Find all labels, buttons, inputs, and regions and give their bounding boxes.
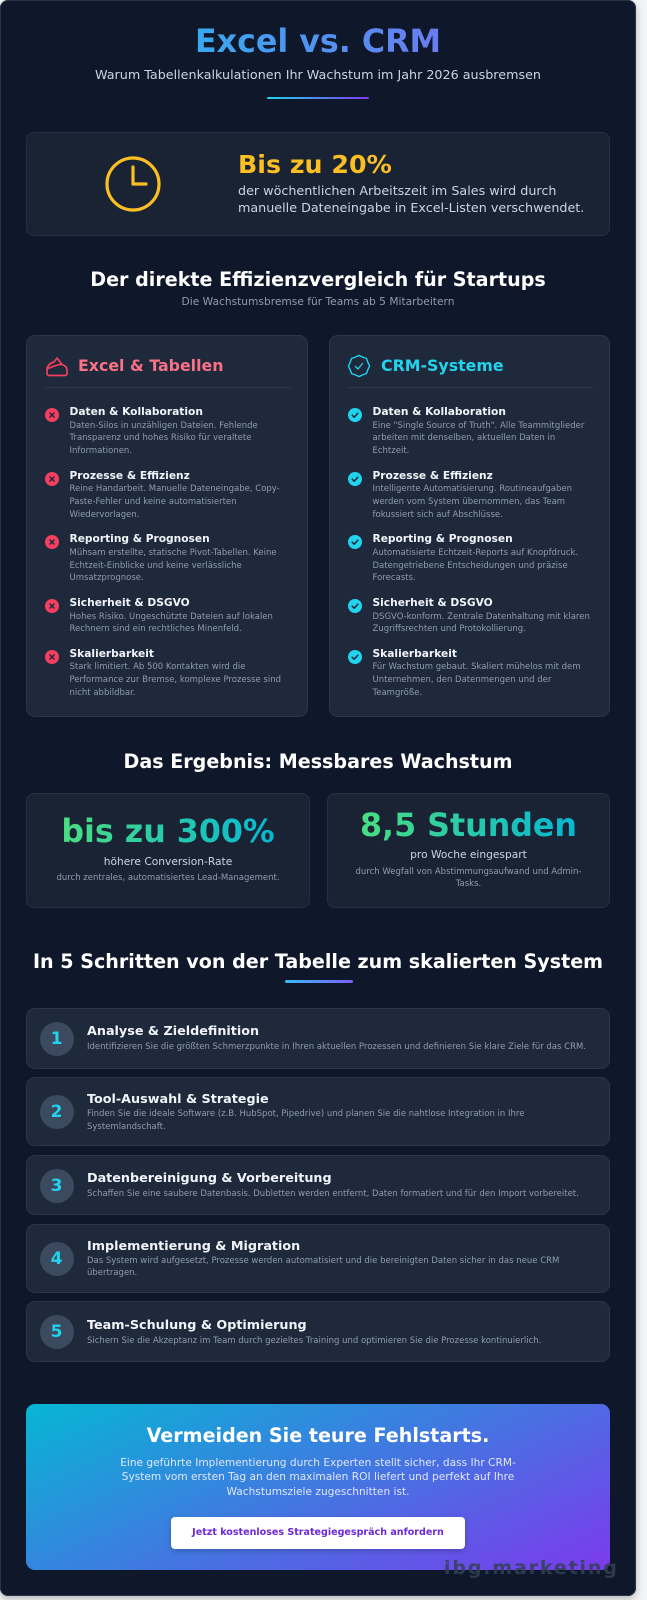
text: Für Wachstum gebaut. Skaliert mühelos mit dem	[372, 662, 581, 672]
step 3	[26, 1155, 610, 1215]
text	[87, 1256, 559, 1278]
title: Sicherheit & DSGVO	[372, 596, 493, 609]
title: Prozesse & Effizienz	[70, 469, 190, 482]
text: Automatisierte Echtzeit-Reports auf Knopfdruck.	[372, 548, 578, 558]
icon: check	[348, 535, 362, 549]
number	[40, 1315, 74, 1349]
icon: check	[348, 599, 362, 613]
title: Skalierbarkeit	[372, 647, 457, 660]
text: Sichern Sie die Akzeptanz im Team durch gezieltes Training und optimieren Sie die Prozesse kontinuierlich.	[87, 1336, 541, 1346]
text	[70, 420, 258, 456]
title: Sicherheit & DSGVO	[70, 596, 190, 609]
excel heading: Excel & Tabellen	[78, 356, 223, 375]
step 2	[26, 1077, 610, 1146]
text: Hohes Risiko. Ungeschützte Dateien auf lokalen	[70, 612, 273, 622]
icon: cross	[45, 650, 59, 664]
text	[372, 420, 584, 456]
stat value: bis zu 300%	[61, 814, 275, 850]
text: Systemlandschaft.	[87, 1122, 166, 1132]
step 1	[26, 1008, 610, 1069]
excel item 4	[45, 596, 273, 634]
number: 5	[51, 1322, 62, 1342]
title: Datenbereinigung & Vorbereitung	[87, 1171, 332, 1186]
heading: results: Das Ergebnis: Messbares Wachstum	[123, 750, 513, 773]
stat value: 8,5 Stunden	[360, 808, 577, 844]
text	[70, 662, 281, 698]
text: Finden Sie die ideale Software (z.B. HubSpot, Pipedrive) und planen Sie die nahtlose Integration in Ihre	[87, 1109, 524, 1119]
stat label: pro Woche eingespart	[410, 848, 527, 861]
excel item 3	[45, 532, 277, 583]
title: Daten & Kollaboration	[70, 405, 203, 418]
text: fokussiert sich auf Abschlüsse.	[372, 510, 503, 520]
steps divider	[284, 980, 352, 982]
number	[40, 1022, 74, 1056]
icon: clock	[105, 156, 161, 212]
watermark: ibg.marketing	[444, 1556, 619, 1578]
number: 2	[51, 1102, 62, 1122]
cta heading: Vermeiden Sie teure Fehlstarts.	[147, 1424, 489, 1447]
text	[372, 662, 581, 698]
step 4	[26, 1224, 610, 1293]
hero text: der wöchentlichen Arbeitszeit im Sales wird durch	[238, 183, 556, 198]
text: Schaffen Sie eine saubere Datenbasis. Dubletten werden entfernt, Daten formatiert und für den Import vorbereitet.	[87, 1188, 579, 1198]
crm item 2	[348, 469, 572, 520]
title: Skalierbarkeit	[70, 647, 154, 660]
excel item 1	[45, 405, 258, 456]
icon: excel cloud	[46, 357, 68, 376]
hero headline: Bis zu 20%	[238, 150, 392, 179]
text: Echtzeit-Einblicke und keine verlässliche	[70, 561, 242, 571]
heading: steps: In 5 Schritten von der Tabelle zum skalierten System	[33, 950, 603, 973]
text: Stark limitiert. Ab 500 Kontakten wird die	[70, 662, 246, 672]
text	[87, 1109, 524, 1132]
icon: cross	[45, 599, 59, 613]
cta button	[171, 1517, 465, 1549]
text: Transparenz und hohes Risiko für veraltete	[70, 433, 251, 443]
number	[40, 1242, 74, 1276]
icon: cross	[45, 408, 59, 422]
text: nicht abbildbar.	[70, 688, 135, 698]
text: Paste-Fehler und keine automatisierten	[70, 497, 237, 507]
text: Eine "Single Source of Truth". Alle Teammitglieder	[372, 420, 584, 430]
panel: stat time	[327, 793, 610, 908]
text: arbeiten mit denselben, aktuellen Daten in	[372, 433, 555, 443]
text: DSGVO-konform. Zentrale Datenhaltung mit klaren	[372, 612, 590, 622]
title: Reporting & Prognosen	[70, 532, 210, 545]
cta text	[26, 1456, 610, 1500]
icon: check	[348, 408, 362, 422]
cta button: Jetzt kostenloses Strategiegespräch anfordern	[192, 1527, 444, 1538]
text	[70, 548, 277, 583]
title: Tool-Auswahl & Strategie	[87, 1092, 269, 1107]
text: Daten-Silos in unzähligen Dateien. Fehlende	[70, 420, 258, 430]
subheading: comparison: Die Wachstumsbremse für Teams ab 5 Mitarbeitern	[182, 295, 454, 308]
number	[40, 1095, 74, 1129]
hero text: manuelle Dateneingabe in Excel-Listen verschwendet.	[238, 200, 584, 215]
crm heading: CRM-Systeme	[381, 356, 504, 375]
hero text	[238, 183, 584, 215]
text: Intelligente Automatisierung. Routineaufgaben	[372, 484, 572, 494]
text	[70, 612, 273, 634]
panel: Excel	[26, 335, 308, 717]
crm item 1	[348, 405, 584, 456]
stat label: höhere Conversion-Rate	[104, 855, 232, 868]
stat note: durch Wegfall von Abstimmungsaufwand und Admin-	[356, 866, 581, 876]
text: übertragen.	[87, 1268, 137, 1278]
title: Implementierung & Migration	[87, 1238, 300, 1254]
stat note	[356, 866, 581, 889]
text: Umsatzprognose.	[70, 573, 144, 583]
number	[40, 1168, 74, 1202]
icon: check	[348, 650, 362, 664]
text	[70, 484, 280, 520]
icon: cross	[45, 472, 59, 486]
text: Reine Handarbeit. Manuelle Dateneingabe, Copy-	[70, 484, 280, 494]
crm item 3	[348, 532, 578, 583]
text: Teamgröße.	[372, 688, 422, 698]
title: Team-Schulung & Optimierung	[87, 1318, 307, 1333]
text: Performance zur Bremse, komplexe Prozesse sind	[70, 675, 281, 685]
text: Mühsam erstellte, statische Pivot-Tabellen. Keine	[70, 548, 277, 558]
text: Wiedervorlagen.	[70, 510, 139, 520]
stat note: durch zentrales, automatisiertes Lead-Management.	[56, 873, 280, 883]
stat note: Tasks.	[456, 879, 481, 889]
subtitle: Warum Tabellenkalkulationen Ihr Wachstum im Jahr 2026 ausbremsen	[95, 67, 541, 82]
text: Identifizieren Sie die größten Schmerzpunkte in Ihren aktuellen Prozessen und definieren Sie klare Ziele für das CRM.	[87, 1042, 586, 1052]
cta text: Eine geführte Implementierung durch Experten stellt sicher, dass Ihr CRM-	[120, 1456, 516, 1468]
text	[372, 484, 572, 520]
cta text: Wachstumsziele zugeschnitten ist.	[226, 1486, 410, 1498]
title: Prozesse & Effizienz	[372, 469, 493, 482]
icon: cross	[45, 535, 59, 549]
excel item 2	[45, 469, 280, 520]
text: Zugriffsrechten und Protokollierung.	[372, 624, 526, 634]
excel item 5	[45, 647, 281, 698]
panel: stat conversion	[26, 793, 310, 908]
crm item 4	[348, 596, 590, 634]
text: Unternehmen, den Datenmengen und der	[372, 675, 551, 685]
header divider	[267, 96, 369, 98]
title: Analyse & Zieldefinition	[87, 1024, 259, 1039]
heading: comparison: Der direkte Effizienzvergleich für Startups	[90, 268, 546, 291]
crm item 5	[348, 647, 581, 698]
text: Forecasts.	[372, 573, 416, 583]
number: 4	[51, 1249, 62, 1269]
number: 1	[51, 1029, 62, 1049]
number: 3	[51, 1176, 62, 1196]
text: Informationen.	[70, 446, 132, 456]
title: Daten & Kollaboration	[372, 405, 506, 418]
cta text: System vom ersten Tag an den maximalen ROI liefert und perfekt auf Ihre	[122, 1471, 514, 1483]
title: Reporting & Prognosen	[372, 532, 513, 545]
text	[372, 548, 578, 583]
text	[372, 612, 590, 634]
panel: CRM	[329, 335, 610, 717]
text: werden vom System übernommen, das Team	[372, 497, 565, 507]
step 5	[26, 1301, 610, 1362]
text: Echtzeit.	[372, 446, 409, 456]
panel: hero stat	[26, 132, 610, 236]
text: Das System wird aufgesetzt, Prozesse werden automatisiert und die bereinigten Daten sicher in das neue CRM	[87, 1256, 559, 1266]
text: Datengetriebene Entscheidungen und präzise	[372, 561, 568, 571]
text: Rechnern sind ein rechtliches Minenfeld.	[70, 624, 242, 634]
panel: call to action	[26, 1404, 610, 1570]
icon: check	[348, 472, 362, 486]
title: Excel vs. CRM	[195, 24, 441, 60]
icon: crm badge	[348, 354, 370, 378]
